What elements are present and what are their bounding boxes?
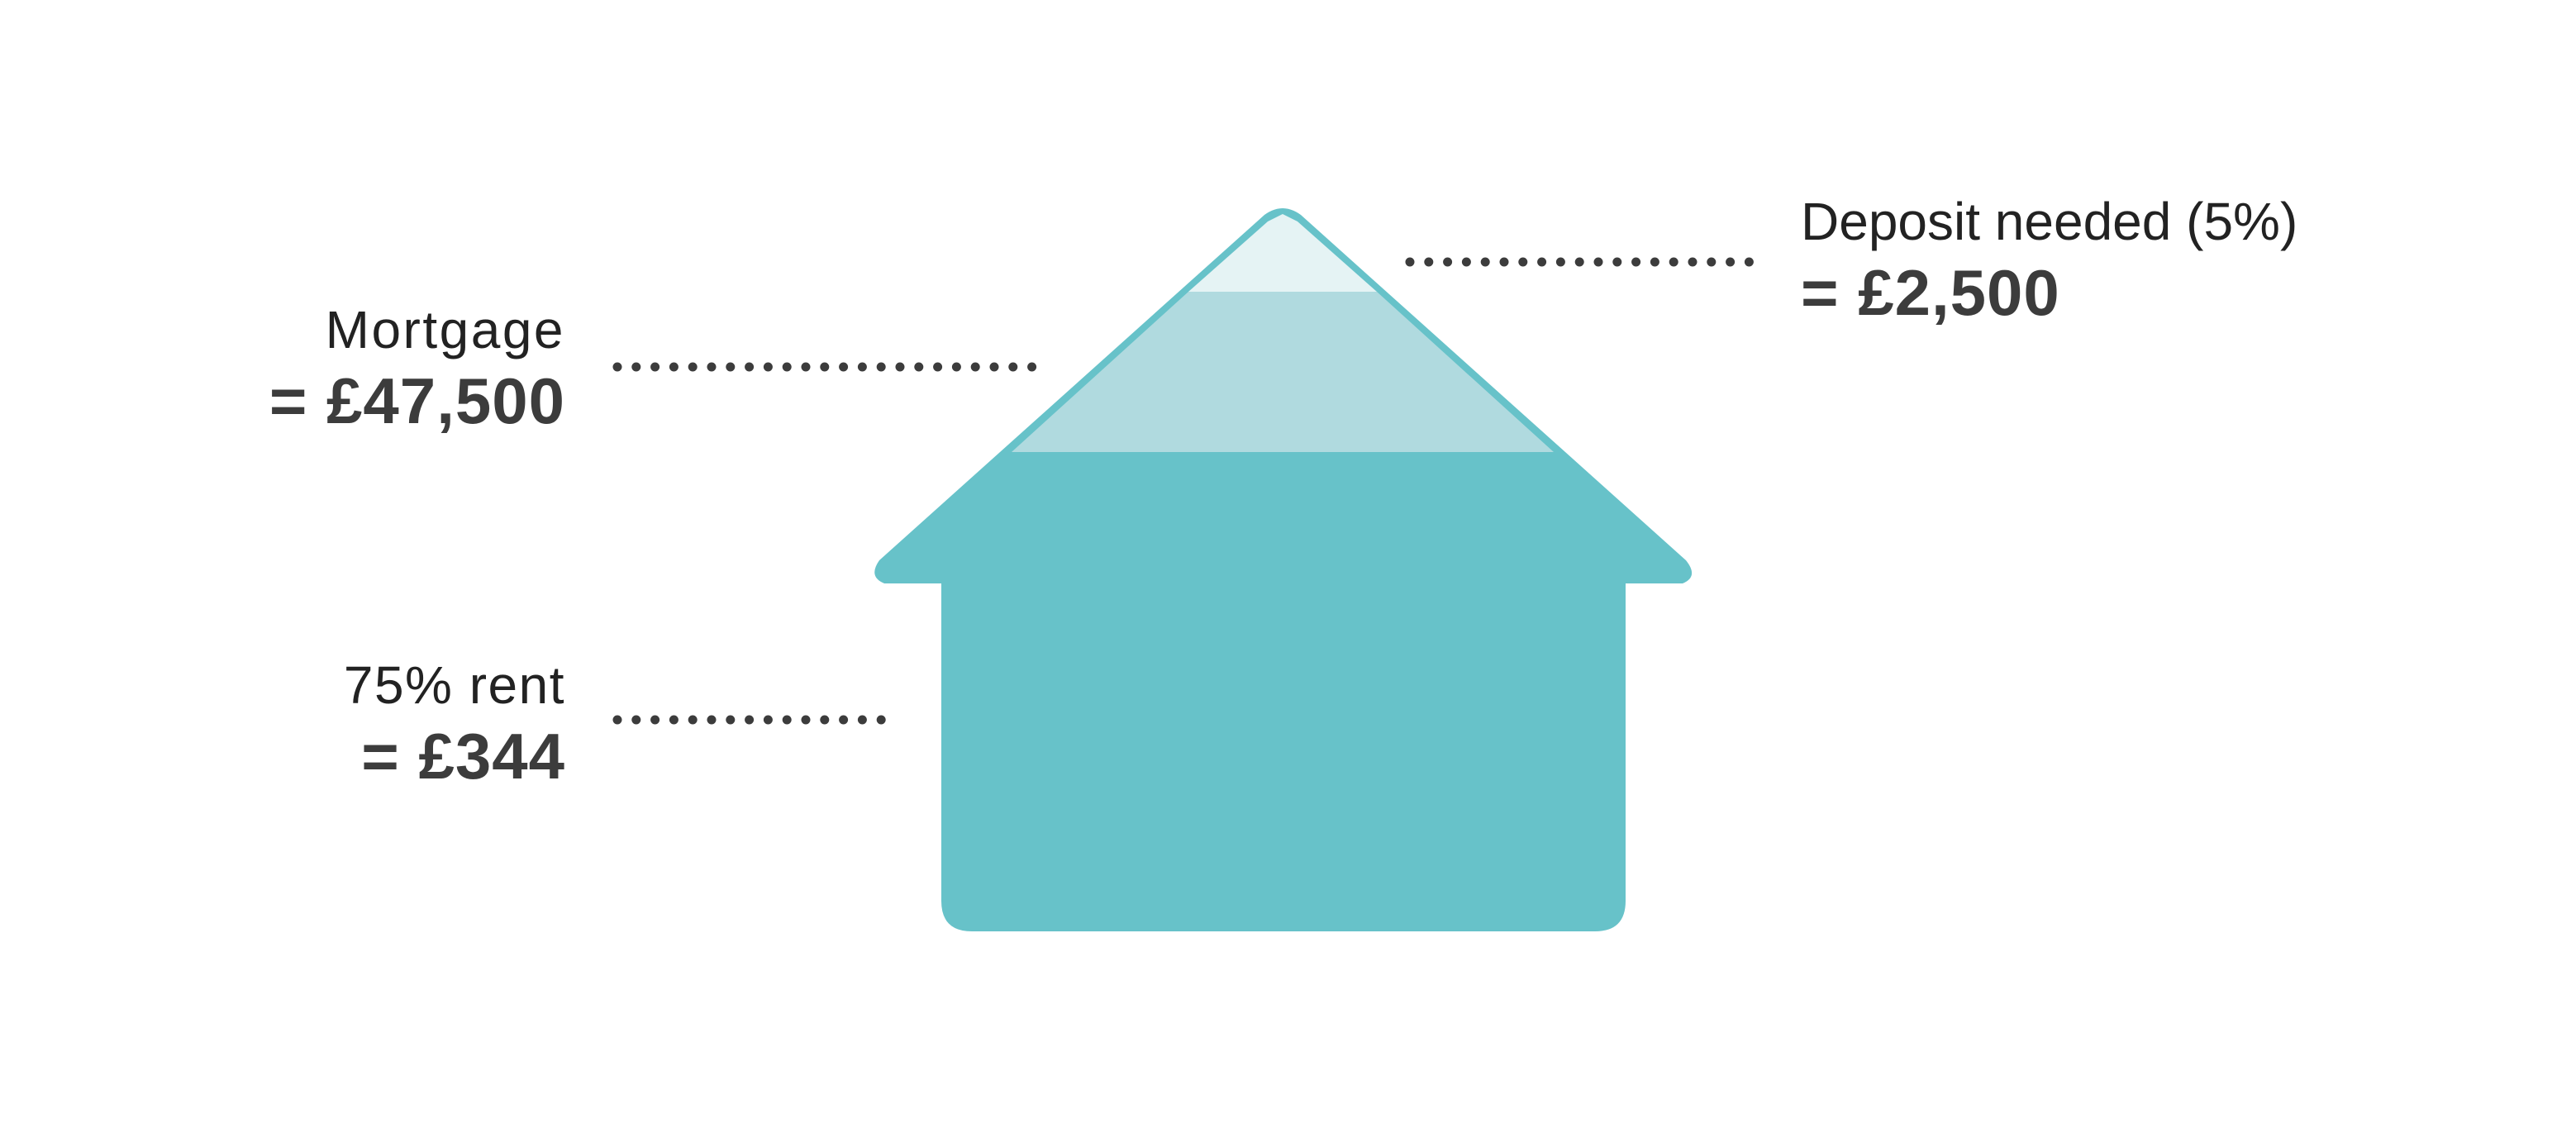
house: [874, 208, 1692, 931]
label: mortgage: = £47,500: [269, 364, 565, 437]
leader: mortgage: [617, 362, 1033, 372]
label: deposit: = £2,500: [1801, 256, 2060, 329]
leader: deposit: [1410, 258, 1756, 266]
label: rent: 75% rent: [344, 655, 565, 715]
label: deposit: [1801, 192, 2297, 329]
mortgage band: [1012, 292, 1554, 452]
label: rent: = £344: [361, 720, 565, 793]
label: deposit: Deposit needed (5%): [1801, 192, 2297, 251]
deposit band: [1188, 214, 1377, 292]
label: mortgage: Mortgage: [326, 300, 565, 359]
leader: rent: [617, 716, 897, 724]
label: mortgage: [269, 300, 565, 437]
label: rent: [344, 655, 565, 793]
